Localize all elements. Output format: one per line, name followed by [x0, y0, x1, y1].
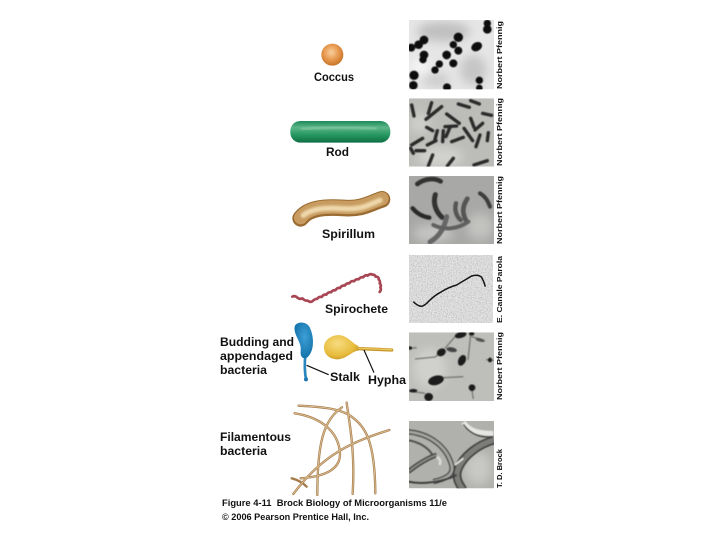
label: Coccus: Coccus	[314, 72, 354, 84]
credit: Norbert Pfennig: Norbert Pfennig	[495, 98, 504, 166]
photo: budding bacteria micrograph	[408, 331, 494, 401]
label: Filamentous bacteria: Filamentous	[220, 432, 291, 444]
icon: budding bacterium with stalk	[295, 323, 313, 381]
credit: Norbert Pfennig: Norbert Pfennig	[495, 332, 504, 400]
photo: coccus micrograph	[407, 20, 494, 91]
label: Budding and appendaged bacteria: bacteria	[220, 365, 268, 377]
label: Filamentous bacteria	[220, 432, 291, 458]
label: Budding and appendaged bacteria: appendaged	[220, 351, 293, 363]
caption: Figure 4-11 Brock Biology of Microorganisms 11/e	[222, 498, 447, 509]
label: Hypha: Hypha	[368, 375, 407, 387]
label: Spirillum: Spirillum	[322, 229, 375, 241]
label: Budding and appendaged bacteria: Budding and	[220, 337, 294, 349]
icon: filamentous bacteria	[292, 403, 389, 495]
credit: Norbert Pfennig: Norbert Pfennig	[495, 21, 504, 89]
photo: rod micrograph	[409, 98, 494, 167]
photo: spirochete micrograph	[409, 255, 493, 323]
caption: © 2006 Pearson Prentice Hall, Inc.	[222, 512, 369, 523]
label: Stalk: Stalk	[330, 372, 361, 384]
leader lines	[307, 350, 374, 375]
label: Budding and appendaged bacteria	[220, 337, 294, 377]
icon: spirillum	[301, 199, 382, 218]
label: Spirochete: Spirochete	[325, 304, 388, 316]
icon: rod	[290, 121, 390, 143]
label: Rod: Rod	[326, 147, 349, 159]
icon: spirochete	[292, 274, 381, 302]
credit: Norbert Pfennig: Norbert Pfennig	[495, 176, 504, 244]
credit: E. Canale Parola: E. Canale Parola	[495, 255, 504, 323]
photo: filamentous micrograph	[407, 421, 494, 490]
icon: appendaged bacterium with hypha	[324, 335, 392, 359]
caption	[222, 498, 447, 523]
photo: spirillum micrograph	[409, 176, 494, 244]
label: Filamentous bacteria: bacteria	[220, 446, 268, 458]
credit: T. D. Brock: T. D. Brock	[495, 448, 504, 488]
icon: coccus	[321, 44, 343, 66]
